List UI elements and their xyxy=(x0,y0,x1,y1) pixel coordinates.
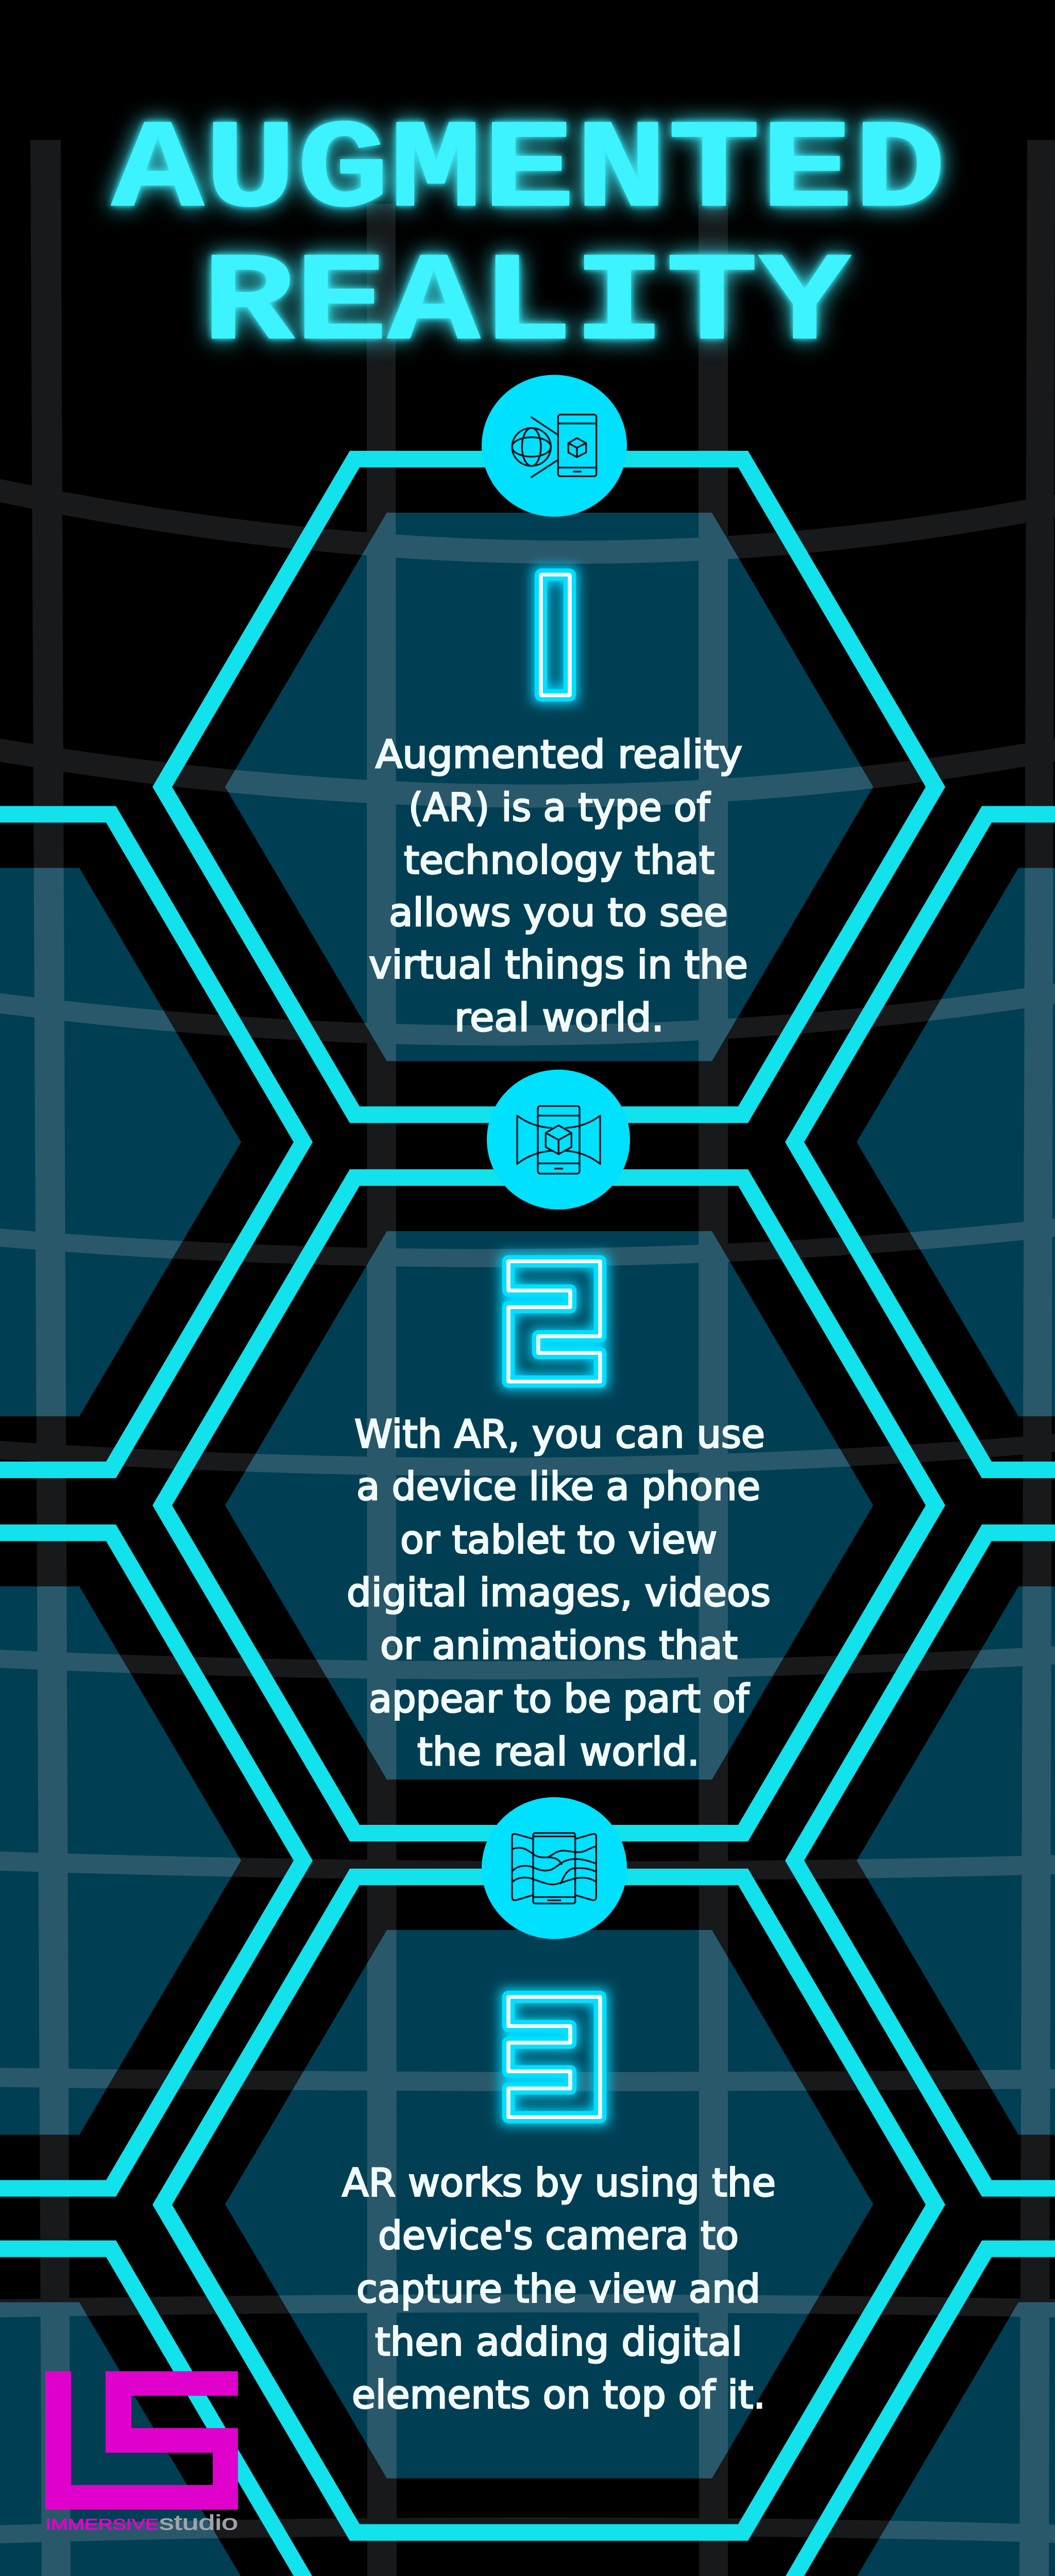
logo: immersive studio: IMMERSIVE xyxy=(45,2516,159,2533)
logo: immersive studio xyxy=(45,2371,238,2534)
text block: step 1: real world. xyxy=(454,995,664,1040)
text block: step 2: With AR, you can use xyxy=(354,1411,765,1456)
icon: phone with wavy panorama badge xyxy=(482,1797,627,1939)
text block: step 1: allows you to see xyxy=(389,890,728,935)
numeral 2 xyxy=(508,1261,600,1382)
text block: step 2: or animations that xyxy=(380,1623,738,1668)
numeral 3 xyxy=(508,1997,600,2117)
text block: step 1: technology that xyxy=(404,837,714,883)
text block: step 2: a device like a phone xyxy=(356,1464,760,1509)
text block: step 2: appear to be part of xyxy=(369,1676,750,1721)
text block: step 2 xyxy=(347,1411,771,1774)
text block: step 3 xyxy=(342,2160,776,2417)
text block: step 3: AR works by using the xyxy=(342,2160,776,2205)
text block: step 2: digital images, videos xyxy=(347,1570,771,1615)
text block: step 3: capture the view and xyxy=(356,2266,760,2312)
title xyxy=(111,101,946,376)
text block: step 1 xyxy=(369,732,748,1040)
text block: step 1: (AR) is a type of xyxy=(409,785,711,830)
text block: step 1: virtual things in the xyxy=(369,942,748,987)
text block: step 3: then adding digital xyxy=(375,2319,742,2364)
numeral 1 xyxy=(541,574,570,696)
text block: step 3: device's camera to xyxy=(378,2213,739,2258)
icon: phone with cube and panorama badge xyxy=(487,1070,630,1210)
text block: step 2: or tablet to view xyxy=(400,1517,717,1562)
text block: step 3: elements on top of it. xyxy=(352,2372,765,2417)
text block: step 1: Augmented reality xyxy=(376,732,742,777)
icon: globe and phone badge xyxy=(482,375,627,517)
title: REALITY xyxy=(202,234,853,376)
title: AUGMENTED xyxy=(111,101,946,244)
logo: immersive studio: studio xyxy=(159,2511,238,2534)
text block: step 2: the real world. xyxy=(417,1729,700,1774)
